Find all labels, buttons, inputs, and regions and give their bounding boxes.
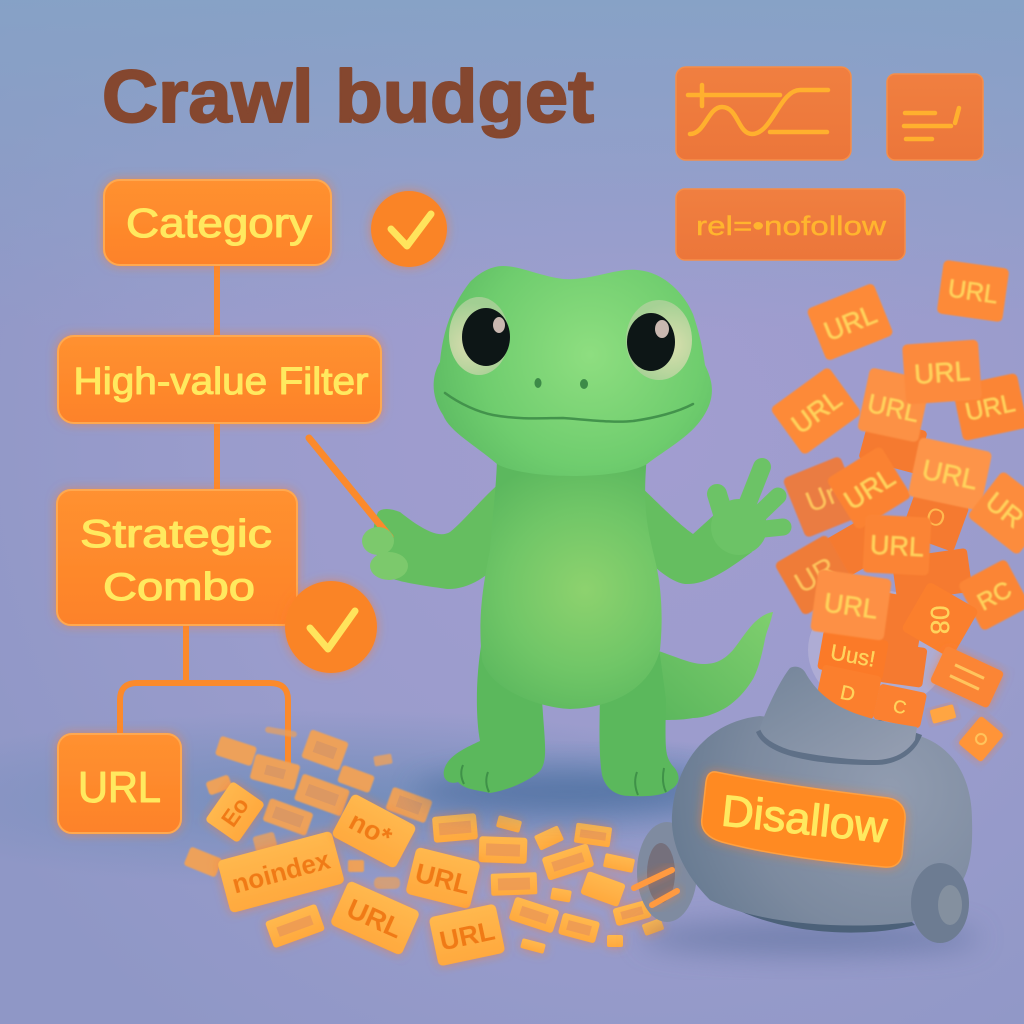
card D — [814, 664, 882, 720]
machine: Disallow cannon — [634, 667, 980, 954]
machine exit pipe — [637, 822, 697, 922]
Eo tag: Eo — [216, 793, 254, 831]
O mark card text: O — [922, 502, 949, 534]
URL tag: URL — [437, 916, 497, 956]
card UR dim — [782, 456, 864, 538]
Disallow label — [702, 772, 905, 867]
gecko left hand fingers — [362, 527, 408, 580]
machine neck — [760, 667, 917, 760]
node: Category — [104, 180, 331, 265]
Disallow label: Disallow — [719, 786, 890, 853]
bright small cards — [265, 813, 664, 954]
node: Strategic Combo: Strategic — [80, 513, 272, 556]
gecko right arm and hand — [632, 467, 783, 584]
machine neck groove — [756, 720, 922, 765]
node: URL — [58, 734, 181, 833]
card U dim: UR — [789, 552, 842, 600]
URL card — [857, 367, 931, 443]
gecko shadow — [415, 772, 715, 812]
character: gecko — [309, 266, 783, 812]
machine pipe opening — [647, 843, 675, 903]
URL tag: URL — [412, 858, 473, 900]
gecko left arm — [374, 478, 505, 589]
no tag: no* — [344, 806, 397, 853]
card U clipped — [967, 470, 1024, 556]
URL card — [826, 446, 912, 530]
gecko eye right — [626, 300, 692, 380]
card U dim — [774, 534, 856, 616]
URL tag — [429, 903, 505, 967]
URL card — [937, 260, 1009, 322]
node: High-value Filter — [58, 336, 381, 423]
card C — [873, 683, 927, 729]
card UR dim: Ur — [801, 478, 842, 519]
card C: C — [891, 696, 908, 718]
node: URL: URL — [78, 763, 161, 812]
machine body — [672, 716, 972, 926]
title: Crawl budget — [102, 55, 594, 138]
URL card — [908, 437, 992, 511]
URL card: URL — [820, 299, 881, 347]
card centers — [276, 821, 644, 937]
glass tube — [808, 590, 948, 710]
machine wheel — [911, 863, 969, 943]
falling URL cards — [770, 260, 1024, 762]
connector lines — [120, 262, 288, 787]
URL card: URL — [839, 462, 900, 516]
no tag — [331, 793, 417, 869]
URL card: URL — [963, 389, 1018, 427]
URL card: URL — [786, 384, 847, 440]
faded cards — [183, 726, 433, 889]
URL card: URL — [869, 530, 925, 562]
URL card: URL — [865, 388, 922, 428]
noindex tag: noindex — [229, 845, 333, 899]
noindex tag — [217, 831, 345, 913]
card equals — [930, 645, 1004, 709]
scattered URL pile — [183, 726, 664, 967]
card RC — [957, 558, 1024, 632]
panel: list icon card — [887, 74, 983, 160]
panel: rel nofollow — [676, 189, 905, 260]
URL tag: URL — [342, 893, 407, 944]
URL card — [770, 366, 862, 456]
URL card — [863, 514, 931, 576]
panel: rel nofollow: rel=•nofollow — [696, 211, 887, 241]
URL card — [806, 283, 894, 361]
URL tag — [405, 847, 481, 909]
gecko eye left — [449, 297, 510, 375]
card D: D — [838, 682, 857, 706]
node: High-value Filter: High-value Filter — [74, 361, 369, 403]
URL card: URL — [919, 454, 981, 495]
URL card — [902, 339, 982, 405]
URL card: URL — [913, 355, 971, 390]
gecko nostrils and mouth — [445, 378, 693, 422]
pointer stick — [309, 438, 390, 537]
small card — [958, 716, 1004, 762]
card Uust — [817, 630, 889, 680]
icon: check badge 2 — [285, 581, 377, 673]
gecko right leg and foot — [600, 640, 679, 796]
gecko tail — [650, 612, 773, 720]
URL tag — [330, 880, 420, 956]
Eo tag — [205, 781, 265, 843]
node: Strategic Combo: Combo — [103, 566, 255, 609]
card RC: RC — [973, 576, 1016, 616]
node: Strategic Combo — [57, 490, 297, 625]
machine base — [705, 890, 915, 933]
gecko head — [434, 266, 712, 476]
URL card: URL — [946, 275, 1000, 309]
exiting cards — [634, 870, 677, 905]
small card — [930, 704, 956, 724]
URL card: URL — [822, 587, 880, 625]
node: Category: Category — [126, 200, 313, 246]
URL card — [810, 569, 892, 641]
card 08: 08 — [925, 606, 955, 634]
back cards — [825, 416, 973, 688]
gecko body — [480, 455, 662, 709]
panel: curve icon card — [676, 67, 851, 160]
card 08 — [901, 581, 979, 659]
icon: check badge 1 — [371, 191, 447, 267]
gecko left leg and foot — [444, 640, 560, 793]
machine shadow — [640, 922, 980, 954]
faded card centers — [264, 741, 422, 828]
card Uust: Uus! — [828, 639, 877, 672]
URL card — [952, 373, 1024, 441]
